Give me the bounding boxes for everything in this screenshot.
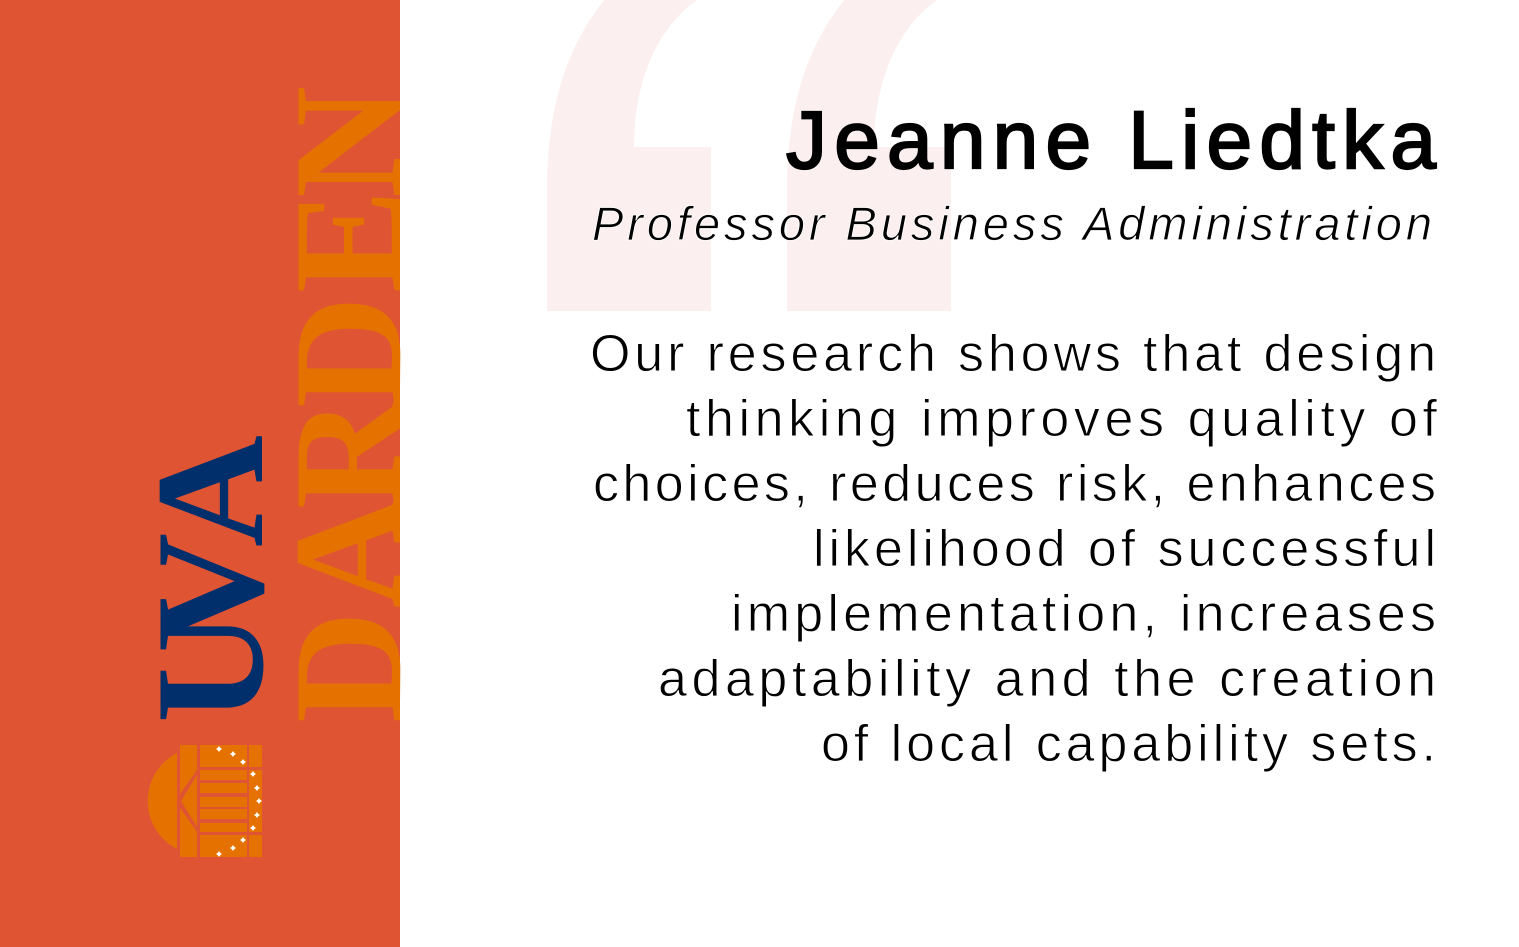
- text block: quote: Our research shows that design: [590, 325, 1436, 383]
- icon: rotunda emblem: [148, 745, 262, 857]
- logo: UVA wordmark: UVA: [124, 435, 296, 723]
- text block: quote: choices, reduces risk, enhances: [593, 455, 1436, 513]
- text block: quote: [590, 325, 1438, 773]
- heading: name: Jeanne Liedtka: [786, 95, 1436, 186]
- text block: quote: likelihood of successful: [813, 520, 1436, 578]
- text block: quote: of local capability sets.: [821, 715, 1436, 773]
- logo: DARDEN wordmark: DARDEN: [262, 86, 434, 723]
- subtitle: job title: Professor Business Administration: [592, 197, 1432, 250]
- text block: quote: adaptability and the creation: [658, 650, 1436, 708]
- icon: large pale quotation marks: [547, 0, 951, 311]
- panel: orange sidebar: [0, 0, 400, 947]
- text block: quote: implementation, increases: [731, 585, 1436, 643]
- text block: quote: thinking improves quality of: [686, 390, 1438, 448]
